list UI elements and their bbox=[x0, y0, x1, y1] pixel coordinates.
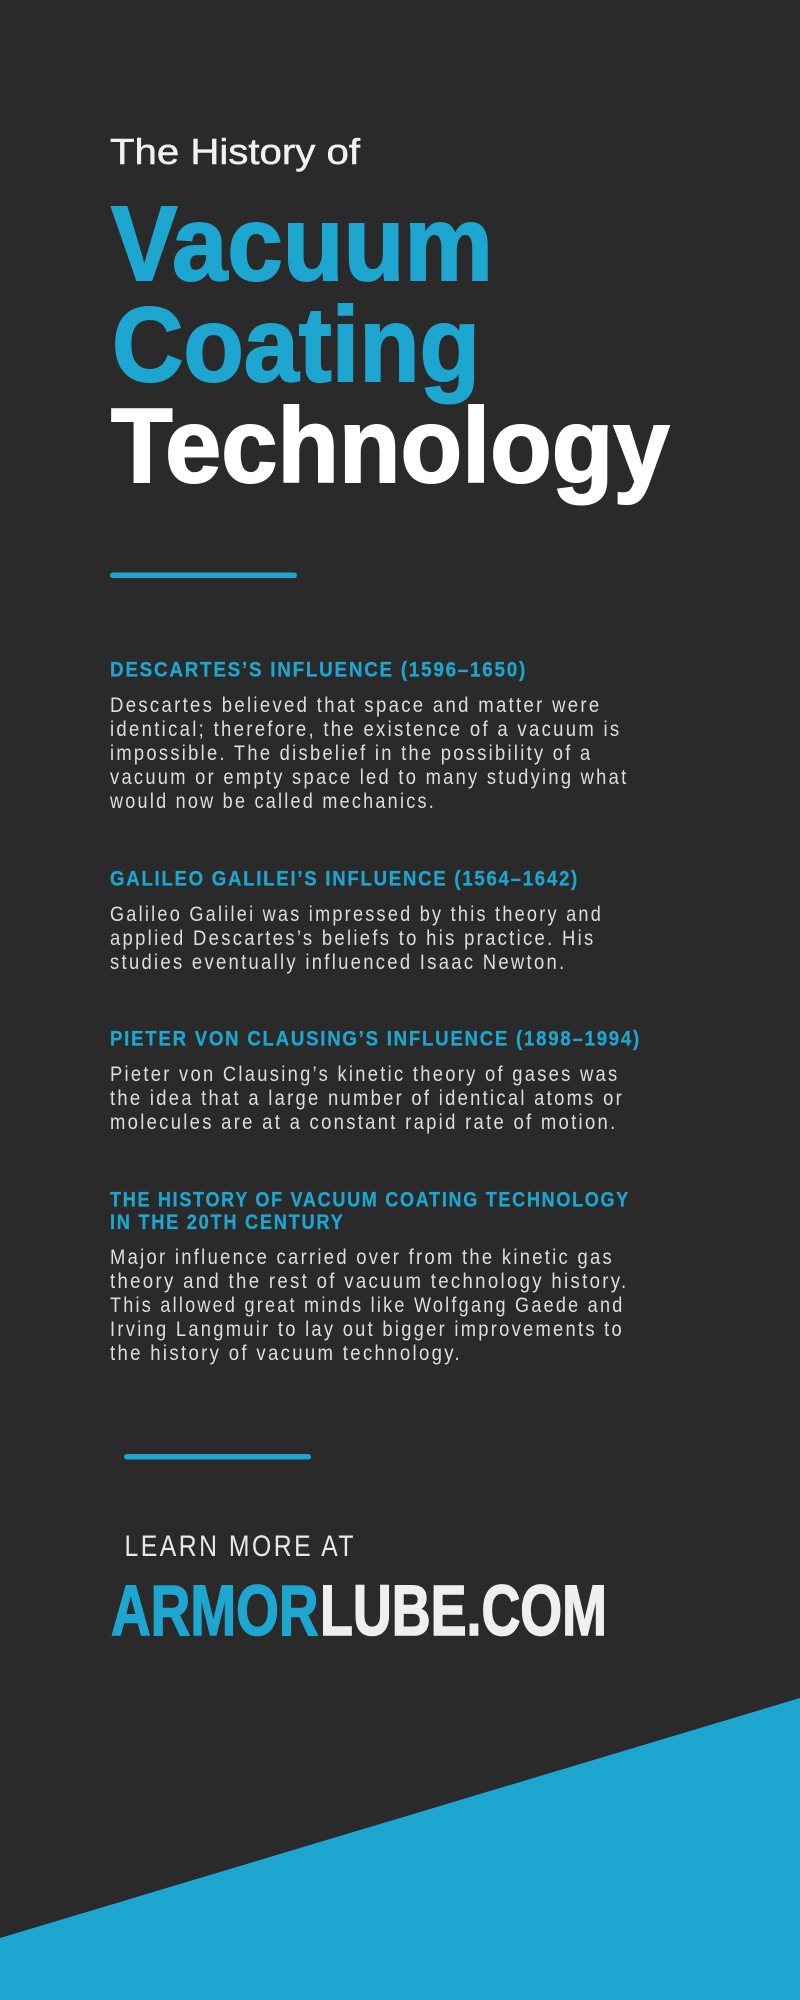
body text: molecules are at a constant rapid rate of motion. bbox=[110, 1111, 618, 1134]
title line: Vacuum: Vacuum bbox=[111, 185, 493, 303]
body text: This allowed great minds like Wolfgang Gaede and bbox=[110, 1294, 624, 1317]
title line: Coating: Coating bbox=[112, 286, 480, 404]
title block bbox=[110, 131, 670, 505]
body text bbox=[110, 1246, 628, 1365]
website address: ARMOR bbox=[111, 1572, 318, 1651]
body text: Descartes believed that space and matter were bbox=[110, 694, 602, 717]
section: Pieter von Clausing bbox=[110, 1026, 641, 1134]
body text: Major influence carried over from the kinetic gas bbox=[110, 1246, 614, 1269]
body text: Galileo Galilei was impressed by this theory and bbox=[110, 903, 603, 926]
body text: the idea that a large number of identical atoms or bbox=[110, 1087, 624, 1110]
body text: would now be called mechanics. bbox=[109, 790, 436, 813]
call to action label: LEARN MORE AT bbox=[124, 1530, 356, 1563]
title kicker: The History of bbox=[110, 131, 361, 172]
heading: DESCARTES’S INFLUENCE (1596–1650) bbox=[110, 658, 527, 682]
section: Galileo bbox=[110, 866, 603, 974]
heading: IN THE 20TH CENTURY bbox=[110, 1210, 344, 1234]
divider: call to action bbox=[124, 1454, 311, 1460]
body text: Pieter von Clausing’s kinetic theory of gases was bbox=[110, 1063, 620, 1086]
body text: the history of vacuum technology. bbox=[110, 1342, 462, 1365]
body text: impossible. The disbelief in the possibility of a bbox=[110, 742, 592, 765]
body text bbox=[109, 694, 628, 813]
heading: PIETER VON CLAUSING’S INFLUENCE (1898–1994) bbox=[110, 1026, 641, 1050]
blue corner triangle bbox=[0, 1698, 800, 2000]
section: 20th century bbox=[110, 1188, 630, 1365]
body text: Irving Langmuir to lay out bigger improvements to bbox=[110, 1318, 624, 1341]
body text: identical; therefore, the existence of a vacuum is bbox=[110, 718, 622, 741]
heading: THE HISTORY OF VACUUM COATING TECHNOLOGY bbox=[110, 1188, 630, 1212]
section: Descartes bbox=[109, 658, 628, 813]
body text: vacuum or empty space led to many studying what bbox=[110, 766, 628, 789]
website address: LUBE.COM bbox=[320, 1572, 607, 1651]
body text bbox=[110, 903, 603, 974]
website address bbox=[111, 1572, 607, 1651]
heading bbox=[110, 1188, 630, 1234]
heading: GALILEO GALILEI’S INFLUENCE (1564–1642) bbox=[110, 866, 579, 890]
title line: Technology: Technology bbox=[111, 387, 670, 505]
body text: applied Descartes’s beliefs to his practice. His bbox=[110, 927, 596, 950]
body text bbox=[110, 1063, 624, 1134]
body text: studies eventually influenced Isaac Newton. bbox=[110, 951, 566, 974]
divider: title bbox=[110, 572, 297, 578]
body text: theory and the rest of vacuum technology history. bbox=[110, 1270, 628, 1293]
